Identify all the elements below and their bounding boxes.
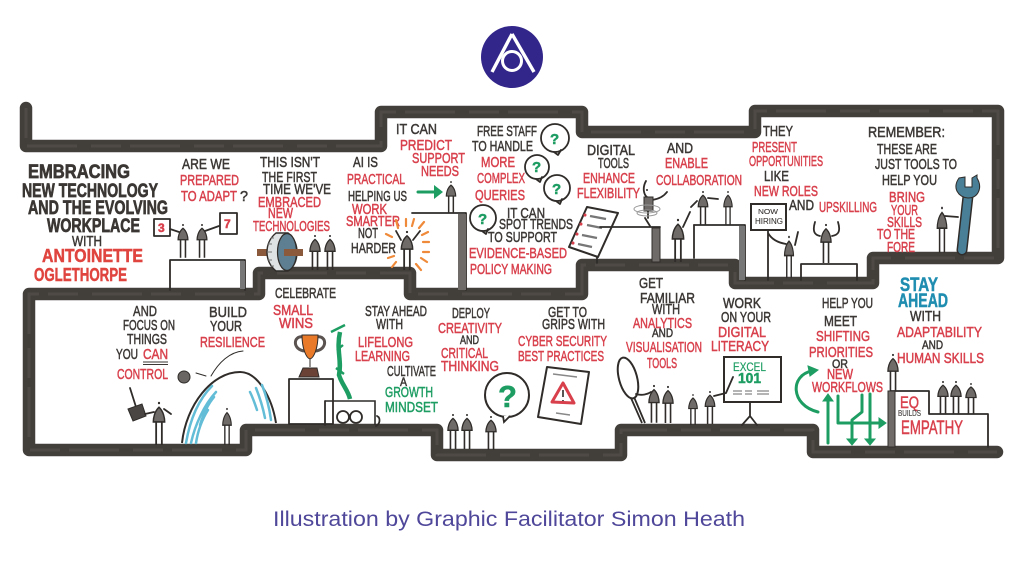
text: and focus on things you can control: AND [133, 303, 157, 320]
text: help you meet shifting priorities: PRIORITIES [809, 344, 873, 361]
text: stay ahead with lifelong learning: STAY AHEAD [365, 303, 427, 320]
text: work on your digital literacy: DIGITAL [718, 324, 766, 341]
text: digital tools enhance flexibility: FLEXIBILITY [577, 185, 640, 202]
text: digital tools enhance flexibility: TOOLS [598, 155, 629, 172]
text: they present opportunities [749, 123, 877, 216]
text: it can predict support needs: SUPPORT [412, 150, 465, 167]
text: get familiar with analytics: AND [652, 326, 673, 340]
text: get familiar with analytics: VISUALISATION [626, 339, 702, 356]
text: deploy creativity and critical thinking: DEPLOY [452, 305, 490, 322]
text: build your resilience: YOUR [210, 318, 242, 335]
text: and focus on things you can control [116, 303, 175, 383]
icons: question speech bubbles: ? [550, 131, 559, 148]
title block: EMBRACING [28, 162, 130, 183]
title block [22, 162, 168, 285]
icons: question speech bubbles [470, 124, 570, 234]
text: free staff: TO HANDLE [472, 138, 533, 155]
text: help you meet shifting priorities: WORKFLOWS [812, 379, 883, 396]
text: cultivate a growth mindset: GROWTH [385, 384, 433, 401]
text: deploy creativity and critical thinking: THINKING [441, 358, 499, 375]
text: celebrate small wins: CELEBRATE [275, 285, 336, 302]
figures: collaborating people on platform [672, 191, 745, 280]
text: free staff: MORE [481, 154, 515, 171]
icon: trophy on plinth [289, 335, 333, 424]
figure: person with idea rays [386, 219, 429, 270]
text: AI is practical: HELPING US [348, 188, 407, 205]
icon: giant wrench with person [937, 175, 980, 253]
icon: magnifying glass with people [614, 355, 673, 423]
text: work on your digital literacy: LITERACY [711, 338, 769, 355]
text: work on your digital literacy [711, 295, 771, 355]
text: not the first time: TIME WE'VE [263, 181, 331, 198]
text: it can predict support needs: NEEDS [421, 163, 459, 180]
text: deploy creativity and critical thinking [438, 305, 502, 375]
text: and enable collaboration: ENABLE [665, 155, 708, 172]
figure: strong person on low platform [801, 222, 857, 280]
text: AI is practical: AI IS [353, 154, 378, 171]
text: help you meet shifting priorities: OR [832, 357, 848, 371]
text: are we prepared to adapt: PREPARED [180, 172, 239, 189]
text: help you meet shifting priorities: HELP YOU [822, 295, 873, 312]
title block: ANTOINETTE [42, 246, 143, 266]
text: stay ahead with adaptability: HUMAN SKILLS [897, 350, 984, 367]
text: AI is practical: WORK [352, 201, 387, 218]
text: get to grips with cyber security: CYBER SECURITY [518, 333, 607, 350]
text: AI is practical: SMARTER [346, 213, 400, 230]
logo [481, 26, 543, 88]
text: get familiar with analytics: WITH [652, 301, 680, 318]
sign: now hiring [751, 204, 798, 280]
text: they present opportunities: AND [789, 197, 814, 214]
text: and enable collaboration [656, 140, 742, 189]
text: get familiar with analytics: TOOLS [647, 355, 677, 372]
illustration: protective dome with person and bouncing rock [178, 351, 276, 445]
text: work on your digital literacy: ON YOUR [721, 309, 771, 326]
text: AI is practical: HARDER [351, 240, 396, 257]
text: digital tools enhance flexibility: ENHANCE [583, 170, 635, 187]
text: spot trends: TO SUPPORT [488, 229, 557, 246]
icon: presentation board excel 101: EXCEL [733, 360, 766, 374]
text: get familiar with analytics: ANALYTICS [633, 315, 692, 332]
text: remember: SKILLS [887, 214, 922, 231]
figure: person on tall column with green arrow [412, 181, 466, 290]
icon: document with warning triangle [538, 367, 589, 424]
text: spot trends: IT CAN [507, 205, 545, 222]
text: EQ builds empathy [898, 393, 963, 439]
text: and focus on things you can control: CONTROL [117, 366, 168, 383]
text: remember: TO THE [877, 226, 915, 243]
text: stay ahead with adaptability: ADAPTABILITY [897, 324, 982, 341]
scene: two people with score cards on platform [154, 213, 245, 290]
sign: now hiring: NOW [758, 209, 778, 216]
text: deploy creativity and critical thinking: CREATIVITY [438, 320, 502, 337]
text: free staff: QUERIES [475, 187, 525, 204]
text: EQ builds empathy: EMPATHY [901, 418, 963, 439]
text: help you meet shifting priorities: MEET [824, 313, 857, 330]
text: they present opportunities: PRESENT [752, 139, 797, 156]
text: it can predict support needs: IT CAN [396, 121, 437, 138]
text: are we prepared to adapt: ARE WE [182, 156, 230, 173]
text: not the first time [253, 154, 331, 235]
text: stay ahead with lifelong learning [355, 303, 427, 365]
text: they present opportunities: OPPORTUNITIES [749, 153, 823, 170]
text: remember [868, 124, 957, 256]
text: get familiar with analytics: FAMILIAR [640, 290, 695, 307]
title block: WORKPLACE [47, 216, 140, 237]
text: work on your digital literacy: WORK [723, 295, 761, 312]
text: it can predict support needs [396, 121, 465, 180]
sign: now hiring: HIRING [755, 217, 783, 226]
text: remember: REMEMBER: [868, 124, 945, 141]
figures: three people [448, 414, 496, 450]
text: stay ahead with adaptability: STAY [900, 275, 938, 296]
text: free staff [472, 123, 537, 204]
icon: checklist board [569, 207, 618, 263]
text: are we prepared to adapt: ? [240, 188, 248, 205]
text: free staff: COMPLEX [477, 170, 525, 187]
text: stay ahead with adaptability: WITH [910, 308, 941, 325]
text: build your resilience [200, 304, 265, 351]
text: they present opportunities: UPSKILLING [819, 199, 877, 216]
icon: presentation board excel 101: 101 [738, 370, 761, 387]
text: not the first time: EMBRACED [258, 194, 321, 211]
text: not the first time: NEW [268, 205, 294, 222]
text: deploy creativity and critical thinking: AND [460, 333, 479, 347]
text: digital tools enhance flexibility [577, 142, 640, 202]
text: cultivate a growth mindset: MINDSET [385, 399, 438, 416]
title block: WITH [72, 233, 102, 250]
text: remember: HELP YOU [882, 172, 937, 189]
text: and enable collaboration: AND [667, 140, 693, 157]
text: stay ahead with adaptability [897, 275, 984, 367]
text: not the first time: TECHNOLOGIES [253, 218, 330, 235]
caption: Illustration by Graphic Facilitator Simon Heath [273, 508, 745, 531]
text: stay ahead with adaptability: AHEAD [898, 291, 948, 312]
text: and focus on things you can control: FOCUS ON [123, 317, 175, 334]
text: build your resilience: RESILIENCE [200, 334, 265, 351]
text: build your resilience: BUILD [209, 304, 247, 321]
text: free staff: FREE STAFF [477, 123, 537, 140]
text: spot trends: SPOT TRENDS [499, 216, 573, 233]
text: they present opportunities: THEY [763, 123, 793, 140]
figure: stepped platform with people [888, 354, 988, 447]
text: it can predict support needs: PREDICT [400, 137, 452, 154]
text: are we prepared to adapt [180, 156, 248, 205]
icon: green workflow arrows [796, 366, 886, 445]
icon: large question bubble: ? [498, 379, 517, 414]
text: spot trends: POLICY MAKING [470, 261, 552, 278]
icon: presentation board excel 101 [714, 357, 781, 425]
text: remember: YOUR [891, 202, 918, 219]
text: cultivate a growth mindset: CULTIVATE [387, 363, 436, 380]
text: and focus on things you can control: YOU [116, 346, 138, 363]
text: get to grips with cyber security [518, 304, 607, 365]
text: celebrate small wins: SMALL [273, 302, 313, 319]
title block: AND THE EVOLVING [28, 198, 168, 219]
scene: two people with score cards on platform: 3 [158, 221, 165, 235]
text: stay ahead with adaptability: AND [922, 338, 943, 352]
text: remember: FORE [887, 239, 915, 256]
figures: two people at board [689, 391, 715, 425]
text: deploy creativity and critical thinking: CRITICAL [441, 345, 488, 362]
text: stay ahead with lifelong learning: LIFELONG [358, 334, 413, 351]
text: get to grips with cyber security: BEST PRACTICES [518, 348, 604, 365]
building wall outline [26, 108, 998, 455]
text: cultivate a growth mindset [385, 363, 438, 416]
text: remember: BRING [889, 189, 925, 206]
text: AI is practical: NOT [358, 225, 378, 242]
text: remember: THESE ARE [877, 141, 937, 158]
text: stay ahead with lifelong learning: WITH [376, 316, 403, 333]
text: help you meet shifting priorities [809, 295, 883, 396]
text: not the first time: THIS ISN'T [260, 154, 320, 171]
text: get to grips with cyber security: GRIPS WITH [542, 316, 605, 333]
text: stay ahead with lifelong learning: LEARNING [355, 348, 410, 365]
illustration: growth vine and box with eyes [325, 325, 380, 426]
text: celebrate small wins [273, 285, 336, 332]
text: remember: JUST TOOLS TO [875, 156, 957, 173]
illustration [22, 108, 998, 455]
text: spot trends [469, 205, 573, 278]
figure: flexible person on platform [600, 181, 667, 262]
icons: question speech bubbles: ? [552, 181, 561, 198]
title block: OGLETHORPE [34, 265, 127, 285]
text: they present opportunities: NEW ROLES [754, 183, 818, 200]
text: cultivate a growth mindset: A [400, 375, 407, 389]
text: help you meet shifting priorities: NEW [827, 366, 854, 383]
text: get familiar with analytics [626, 275, 702, 372]
icon: large question bubble [485, 373, 529, 422]
text: digital tools enhance flexibility: DIGITAL [587, 142, 635, 159]
text: not the first time: THE FIRST [262, 169, 317, 186]
text: are we prepared to adapt: TO ADAPT [181, 188, 237, 205]
text: celebrate small wins: WINS [279, 315, 313, 332]
text: and enable collaboration: COLLABORATION [656, 172, 742, 189]
text: get familiar with analytics: GET [639, 275, 663, 292]
text: they present opportunities: LIKE [764, 168, 789, 185]
text: EQ builds empathy: BUILDS [898, 409, 921, 418]
scene: two people with score cards on platform: 7 [224, 217, 231, 231]
icon: stone wheel with two people [257, 233, 335, 271]
icons: question speech bubbles: ? [532, 159, 541, 176]
text: and focus on things you can control: THINGS [127, 331, 167, 348]
text: help you meet shifting priorities: SHIFTING [816, 328, 870, 345]
text: AI is practical [346, 154, 407, 257]
text: EQ builds empathy: EQ [900, 393, 919, 412]
text: spot trends: EVIDENCE-BASED [469, 245, 567, 262]
text: and focus on things you can control: CAN [143, 346, 168, 363]
text: AI is practical: PRACTICAL [347, 171, 405, 188]
text: get to grips with cyber security: GET TO [548, 304, 587, 321]
icons: question speech bubbles: ? [478, 211, 487, 228]
title block: NEW TECHNOLOGY [22, 181, 158, 202]
figure: person with remote control [128, 388, 171, 445]
